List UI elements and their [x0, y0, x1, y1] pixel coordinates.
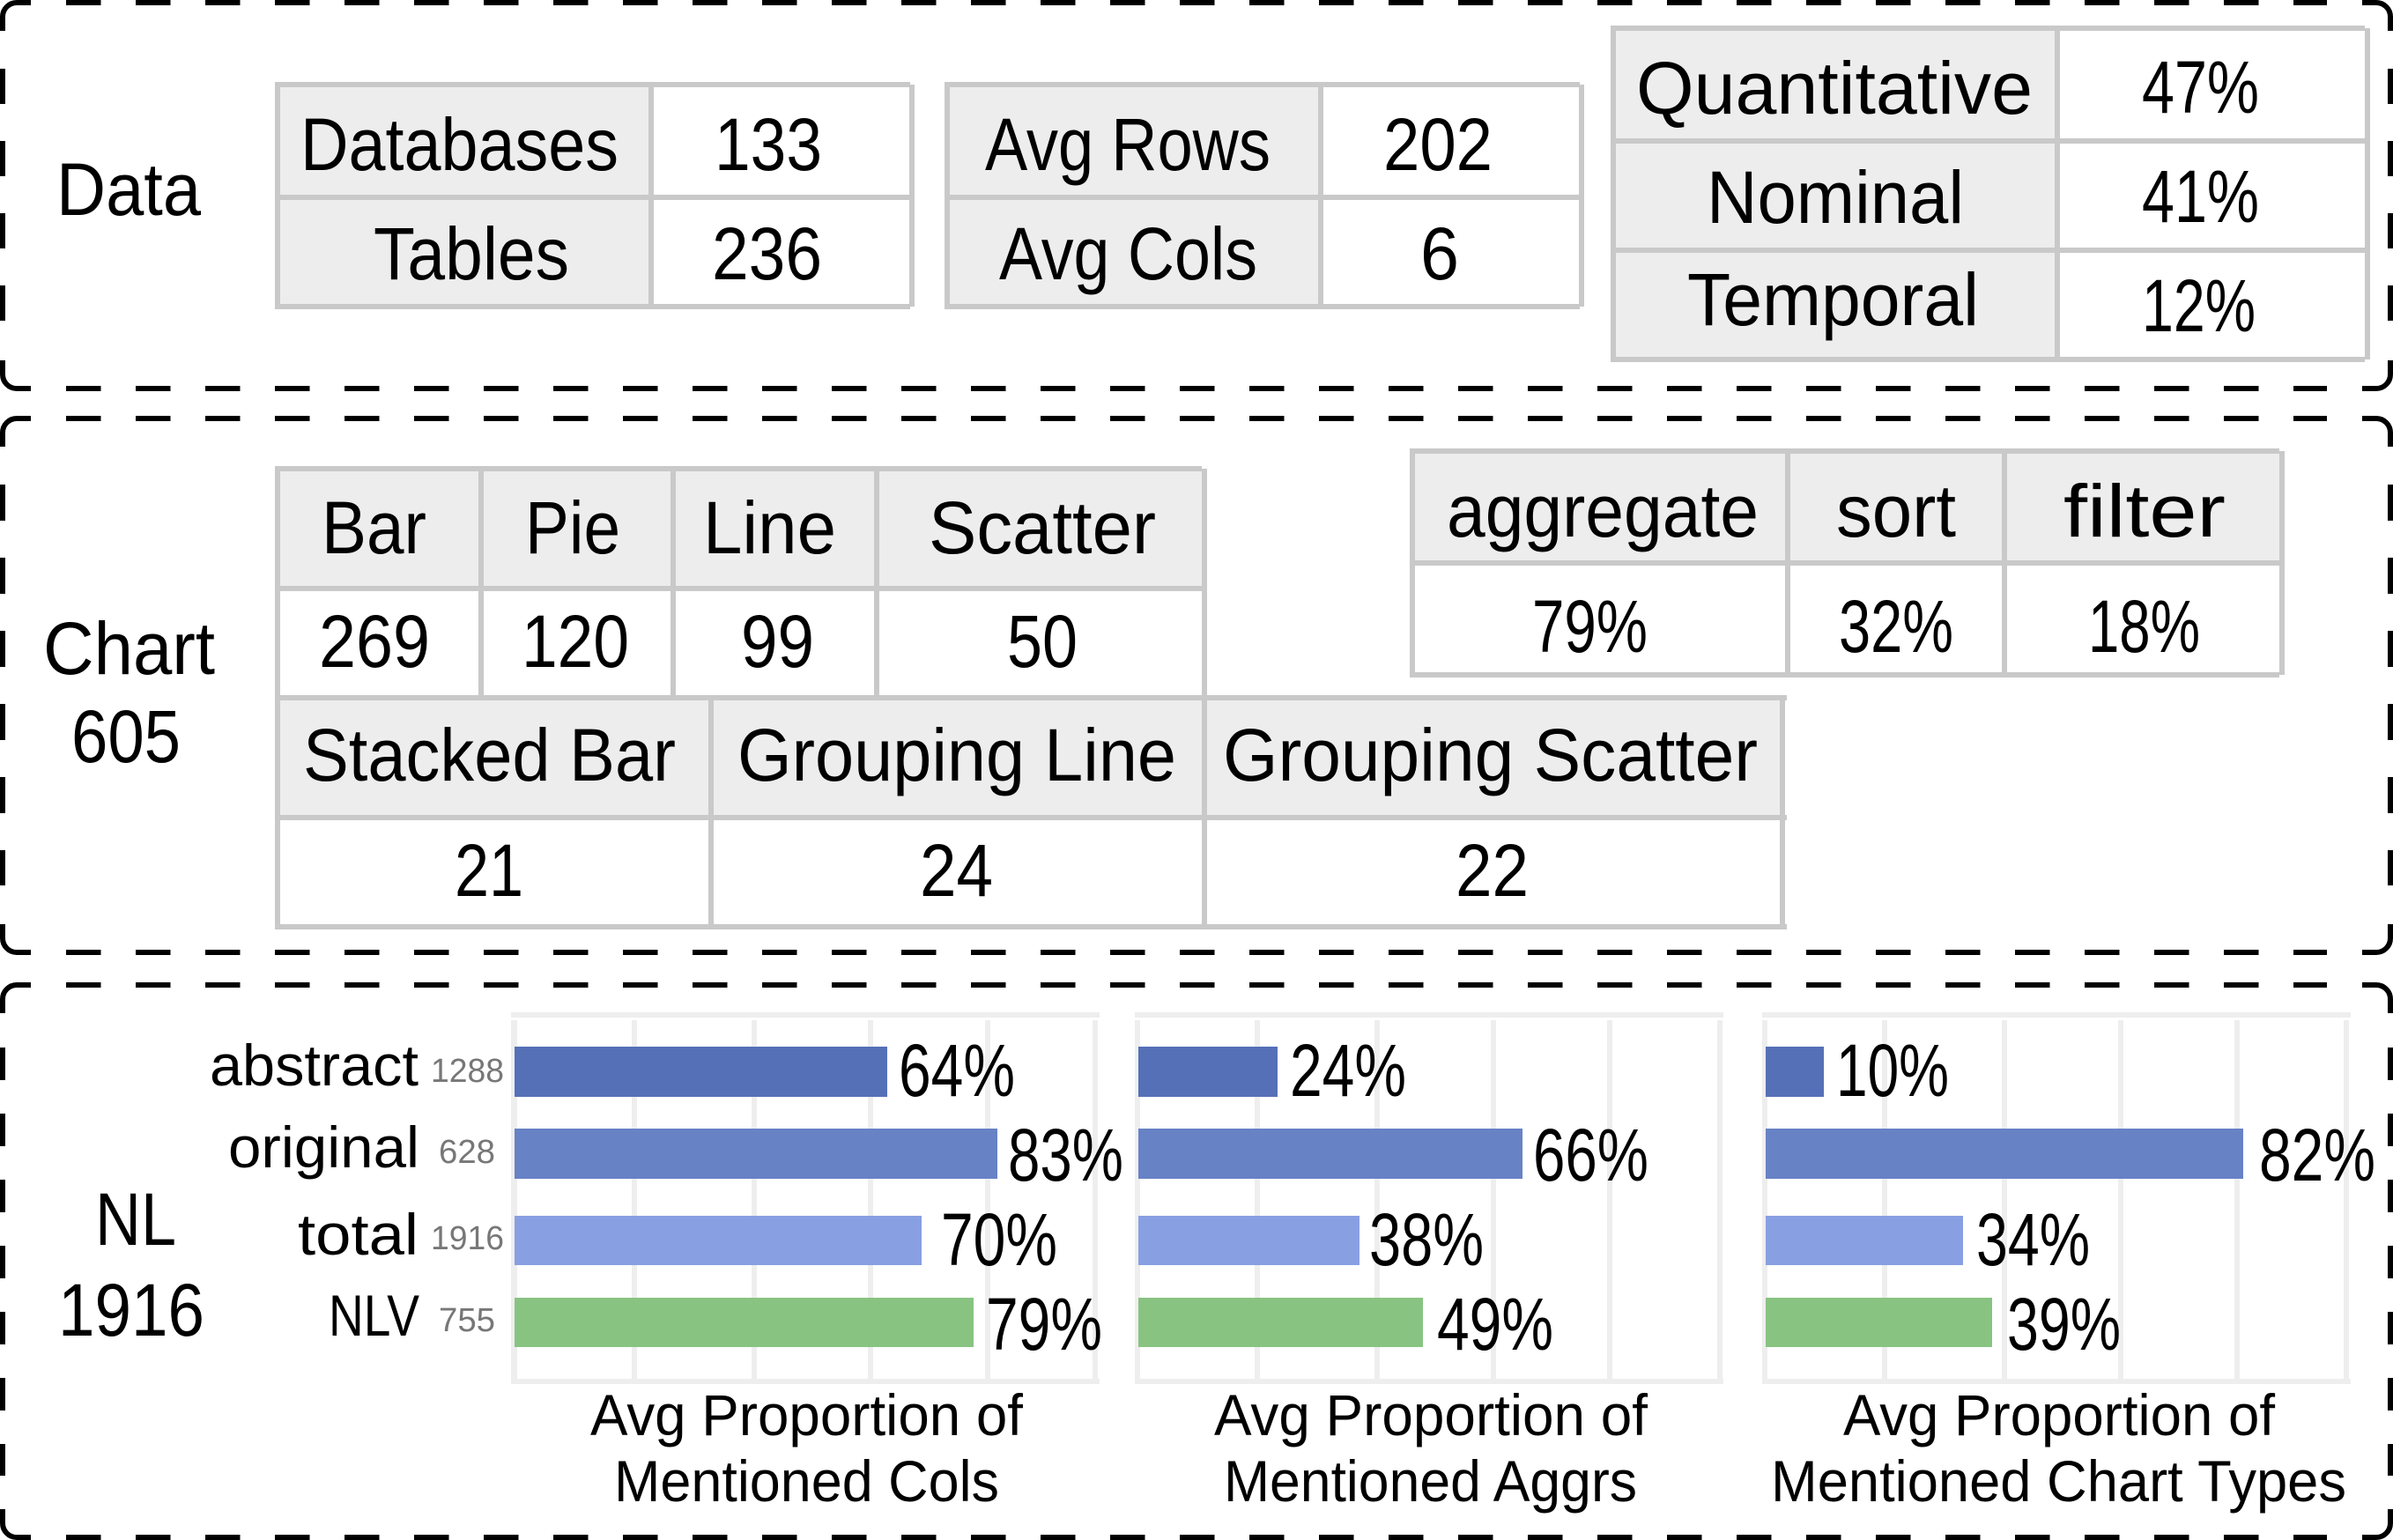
- table: transforms: aggregate: [1447, 470, 1759, 552]
- table: databases and tables: Tables: [374, 212, 569, 295]
- table: basic chart types: 99: [741, 600, 814, 683]
- bar chart: mentioned chart types: Mentioned Chart Types: [1771, 1448, 2346, 1514]
- table: grouped chart types: Grouping Scatter: [1223, 714, 1758, 796]
- heading: chart 605: Chart: [43, 607, 215, 690]
- table: transforms: filter: [2063, 470, 2226, 552]
- row labels: original: [228, 1114, 419, 1180]
- table: column types: Nominal: [1707, 156, 1964, 239]
- table: databases and tables: 236: [712, 212, 822, 295]
- bar chart: mentioned chart types: 34%: [1976, 1198, 2090, 1281]
- bar chart: mentioned cols: [511, 1012, 1123, 1514]
- table: transforms: sort: [1836, 470, 1956, 552]
- bar chart: mentioned cols: 79%: [986, 1283, 1102, 1366]
- panel: chart: [3, 418, 2390, 952]
- panel: chart: 605: [71, 695, 181, 778]
- table: basic chart types: Line: [703, 486, 836, 569]
- bar chart: mentioned aggrs: Avg Proportion of: [1214, 1382, 1648, 1447]
- table: column types: 12%: [2142, 264, 2256, 347]
- table: average rows and columns: Avg Rows: [985, 103, 1271, 186]
- panel: natural language: [3, 985, 2390, 1537]
- table: grouped chart types: Stacked Bar: [303, 714, 676, 796]
- table: grouped chart types: 21: [455, 829, 523, 912]
- bar chart: mentioned chart types: Avg Proportion of: [1843, 1382, 2276, 1447]
- table: average rows and columns: Avg Cols: [999, 212, 1257, 295]
- table: transforms: 32%: [1839, 585, 1953, 668]
- table: grouped chart types: 24: [920, 829, 993, 912]
- table: basic chart types: 120: [522, 600, 629, 683]
- table: column types: [1611, 26, 2370, 362]
- table: databases and tables: Databases: [300, 103, 619, 186]
- bar chart: mentioned aggrs: 38%: [1369, 1198, 1484, 1281]
- bar chart: mentioned chart types: 39%: [2007, 1283, 2121, 1366]
- table: grouped chart types: Grouping Line: [737, 714, 1176, 796]
- bar chart: mentioned cols: 64%: [899, 1029, 1015, 1112]
- panel: data: [3, 3, 2390, 389]
- table: column types: Quantitative: [1636, 47, 2033, 130]
- bar chart: mentioned aggrs: Mentioned Aggrs: [1224, 1448, 1637, 1514]
- table: average rows and columns: [945, 82, 1584, 309]
- table: grouped chart types: [275, 695, 1787, 929]
- panel: natural language: 1916: [58, 1269, 204, 1351]
- table: transforms: [1410, 448, 2285, 677]
- row labels: NLV: [329, 1283, 419, 1348]
- row labels: abstract: [210, 1033, 419, 1098]
- bar chart: mentioned aggrs: 49%: [1437, 1283, 1553, 1366]
- table: basic chart types: Bar: [322, 486, 426, 569]
- heading: data: Data: [56, 148, 201, 231]
- bar chart: mentioned cols: Avg Proportion of: [590, 1382, 1024, 1447]
- table: databases and tables: [275, 82, 915, 309]
- table: basic chart types: Scatter: [929, 486, 1156, 569]
- table: column types: Temporal: [1687, 258, 1979, 341]
- row labels: 1916: [431, 1220, 504, 1257]
- table: basic chart types: [275, 466, 1207, 700]
- table: average rows and columns: 202: [1383, 103, 1493, 186]
- row labels: 755: [439, 1302, 495, 1339]
- table: basic chart types: Pie: [525, 486, 620, 569]
- table: column types: 47%: [2142, 46, 2259, 129]
- bar chart: mentioned aggrs: 24%: [1290, 1029, 1406, 1112]
- table: transforms: 79%: [1532, 585, 1648, 668]
- bar chart: mentioned cols: 70%: [941, 1198, 1057, 1281]
- table: basic chart types: 269: [319, 600, 430, 683]
- table: databases and tables: 133: [715, 103, 822, 186]
- table: grouped chart types: 22: [1456, 829, 1529, 912]
- row labels: 628: [439, 1134, 495, 1171]
- bar chart: mentioned cols: Mentioned Cols: [614, 1448, 999, 1514]
- bar chart: mentioned aggrs: 66%: [1533, 1114, 1648, 1196]
- table: average rows and columns: 6: [1420, 212, 1459, 295]
- table: basic chart types: 50: [1007, 600, 1078, 683]
- bar chart: mentioned chart types: [1762, 1012, 2375, 1514]
- table: column types: 41%: [2142, 155, 2259, 238]
- bar chart: mentioned chart types: 10%: [1836, 1029, 1949, 1112]
- heading: NL 1916: NL: [95, 1178, 176, 1261]
- row labels: 1288: [431, 1053, 504, 1090]
- row labels: total: [298, 1202, 419, 1267]
- bar chart: mentioned cols: 83%: [1008, 1114, 1123, 1196]
- table: transforms: 18%: [2088, 585, 2200, 668]
- bar chart: mentioned aggrs: [1135, 1012, 1723, 1514]
- row labels: [210, 1033, 504, 1348]
